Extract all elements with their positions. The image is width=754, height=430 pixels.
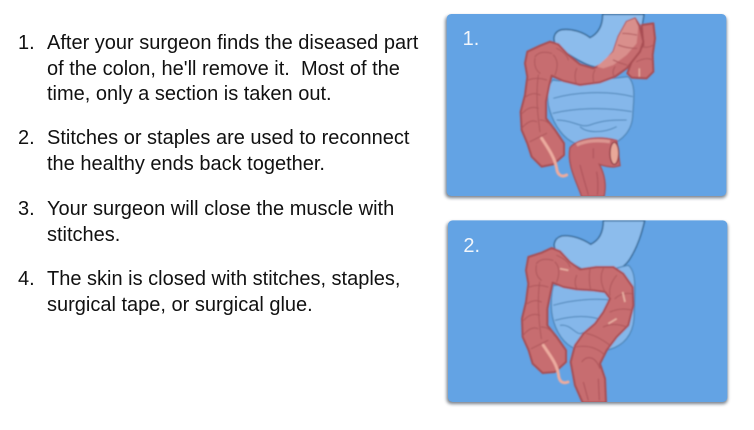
joined colon: [522, 248, 633, 403]
step 4 text: The skin is closed with stitches, staples,: [47, 268, 400, 290]
panel number: 1.: [463, 28, 479, 50]
stomach: [554, 221, 645, 274]
haustra folds: [523, 255, 633, 355]
step 4 text: [18, 268, 400, 316]
descending colon stump: [627, 23, 655, 78]
panel 2: colon reconnected: [447, 220, 728, 404]
step 1 text: of the colon, he'll remove it. Most of the: [47, 58, 400, 80]
step list: [18, 32, 418, 316]
step 1 text: [18, 32, 418, 105]
step 1 text: After your surgeon finds the diseased part: [47, 32, 418, 54]
step 4 text: surgical tape, or surgical glue.: [47, 294, 313, 316]
step 3 text: Your surgeon will close the muscle with: [47, 198, 394, 220]
panel 1: colon with section removed: [445, 14, 727, 198]
step 2 text: [18, 127, 410, 175]
step 2 text: the healthy ends back together.: [47, 153, 325, 175]
step 3 text: stitches.: [47, 224, 120, 246]
step 3 text: [18, 198, 394, 246]
step 3 text: 3.: [18, 198, 35, 220]
step 1 text: time, only a section is taken out.: [47, 83, 332, 105]
colon segment seen through stomach: [597, 18, 638, 68]
panel number: 2.: [463, 235, 480, 257]
illustration: stomach, intestines and colon: [521, 14, 655, 197]
illustration: stomach, intestines and colon: [522, 221, 645, 403]
step 4 text: 4.: [18, 268, 35, 290]
step 2 text: 2.: [18, 127, 35, 149]
appendix: [543, 345, 568, 383]
rectum stump: [569, 138, 620, 197]
step 1 text: 1.: [18, 32, 35, 54]
small intestine: [551, 265, 635, 352]
step 2 text: Stitches or staples are used to reconnect: [47, 127, 409, 149]
small intestine: [548, 77, 634, 147]
appendix: [542, 138, 567, 176]
stomach: [554, 14, 644, 67]
ascending and transverse colon: [521, 18, 643, 167]
